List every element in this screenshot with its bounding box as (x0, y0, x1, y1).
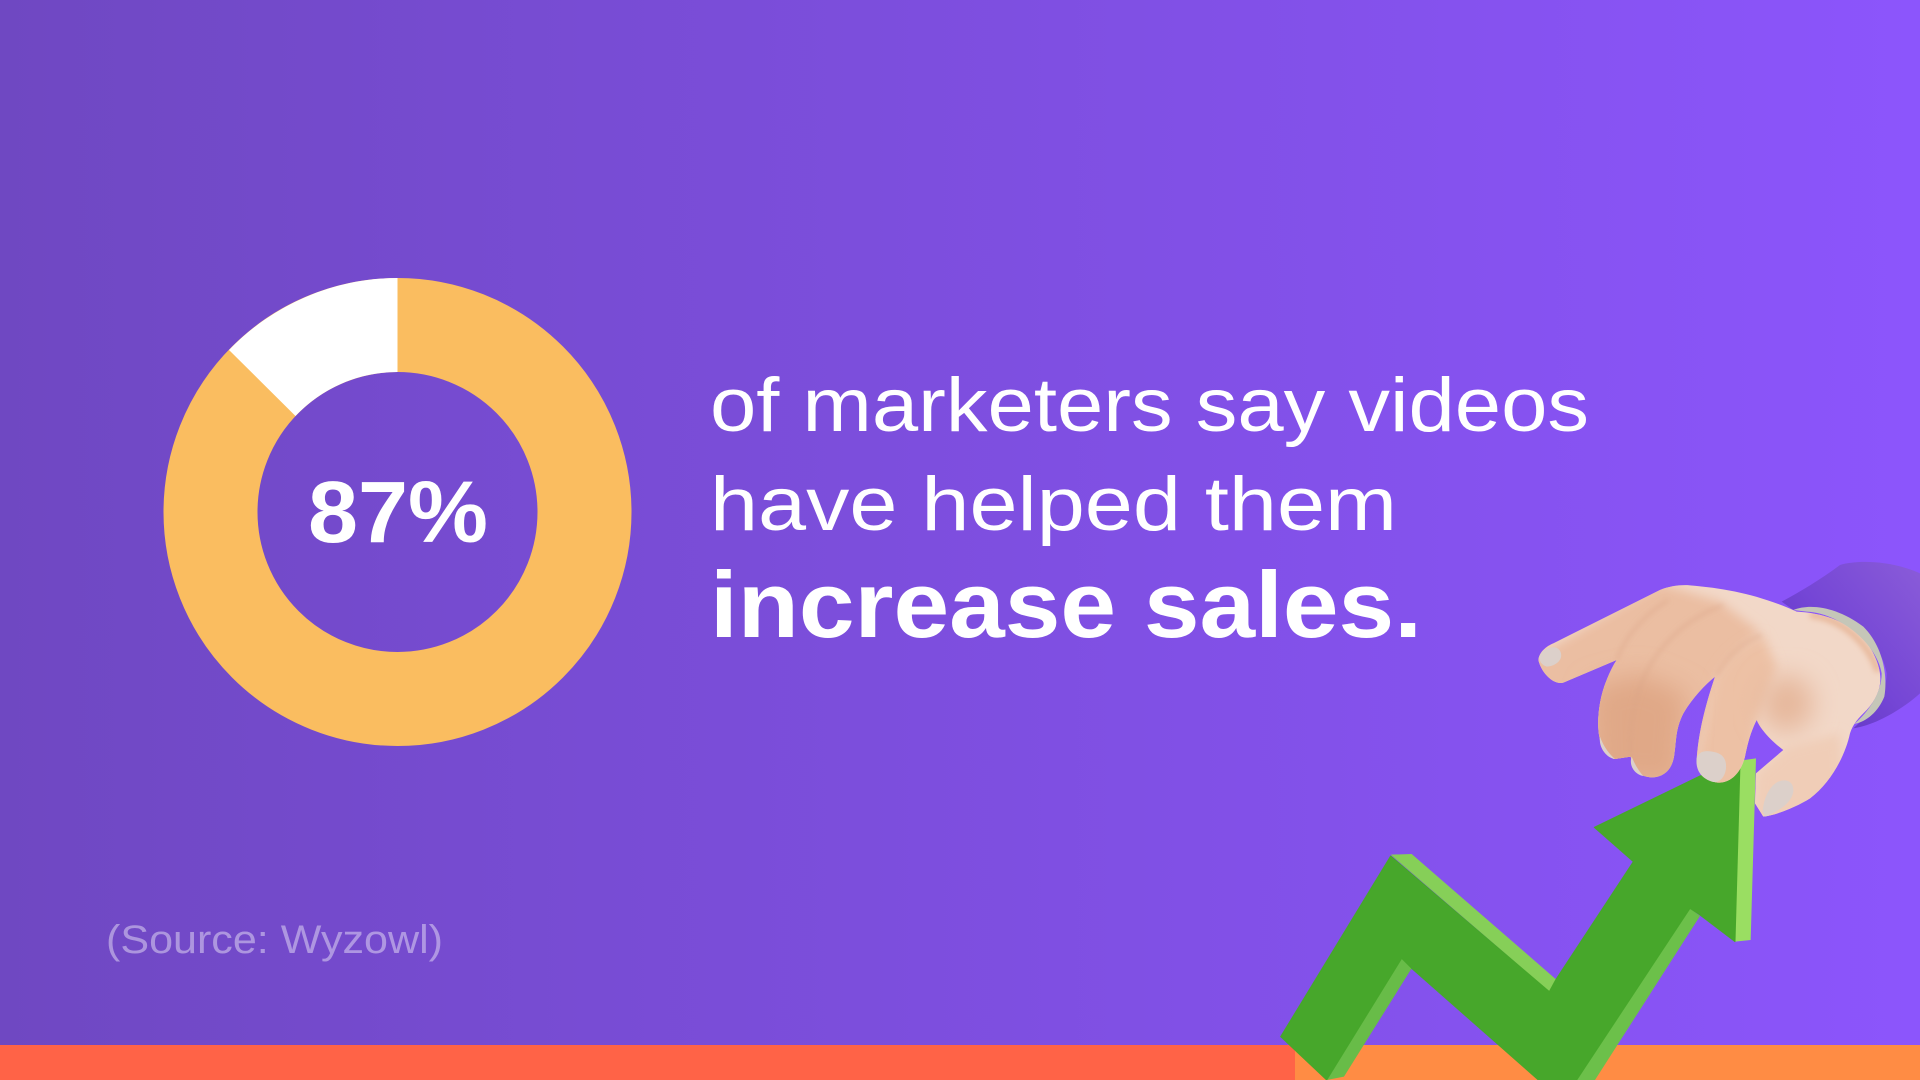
finger tone (1538, 586, 1760, 778)
source note: (Source: Wyzowl) (106, 918, 443, 962)
icon: green growth arrow (1281, 758, 1756, 1080)
donut remainder slice: 13% (229, 278, 398, 416)
main statement text (710, 363, 1589, 657)
shirt cuff (1793, 607, 1885, 724)
main statement text: have helped them (710, 462, 1397, 547)
fingernails (1539, 647, 1793, 817)
thumb tone (1755, 736, 1844, 816)
fingertip shade (1590, 673, 1687, 787)
wrist shadow (1810, 615, 1878, 672)
sleeve cuff (1782, 562, 1920, 728)
finger separations (1749, 635, 1760, 642)
palm shadow (1760, 675, 1813, 732)
icon: hand with sleeve (1520, 560, 1920, 823)
hand silhouette (1538, 585, 1880, 817)
main statement text: of marketers say videos (710, 363, 1589, 448)
bottom bar (0, 1045, 1920, 1080)
main statement text: increase sales. (710, 552, 1422, 657)
fourth finger tone (1697, 635, 1778, 783)
donut chart: 87% (210, 278, 584, 699)
donut value label: 87% (308, 464, 488, 561)
